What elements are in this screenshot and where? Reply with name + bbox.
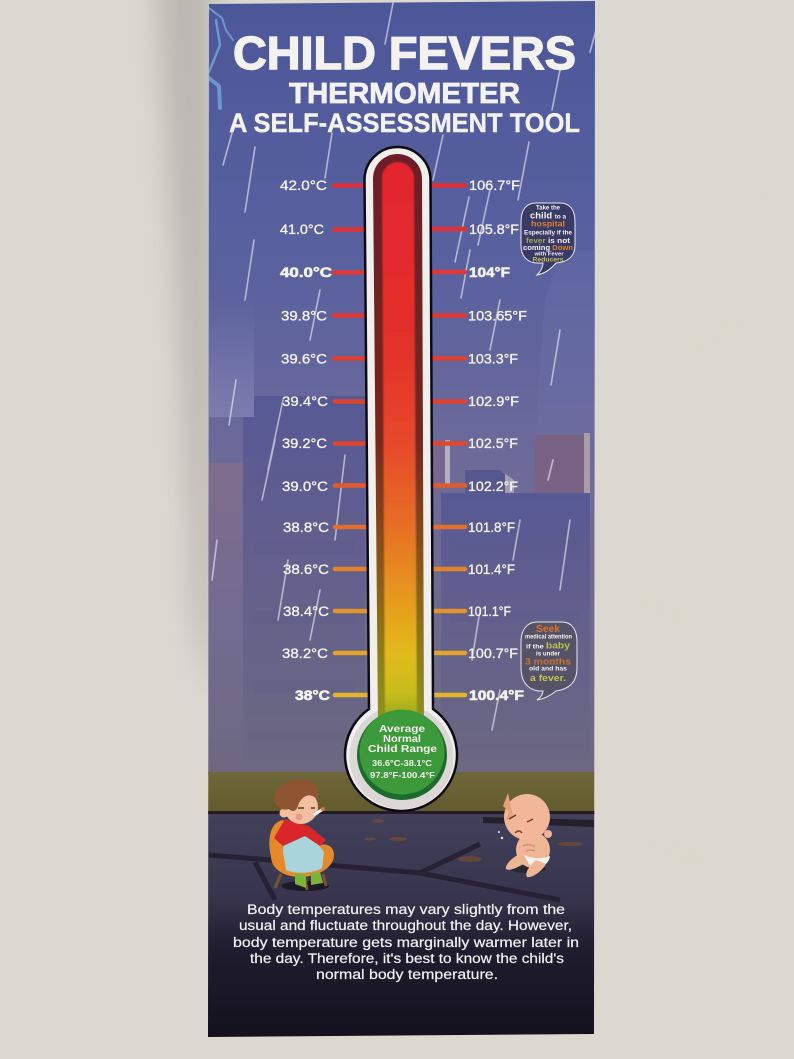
callout: baby under 3 months: is under [536, 650, 560, 658]
Fahrenheit scale labels: 102.2°F [468, 479, 518, 494]
Celsius scale labels: 39.4°C [282, 394, 328, 409]
body text block: Body temperatures may vary slightly from the [247, 902, 565, 917]
callout: hospital advice: fever is not [526, 236, 571, 245]
Celsius scale labels: 38.2°C [282, 646, 328, 661]
Fahrenheit scale labels: 105.8°F [469, 222, 519, 237]
title [229, 27, 580, 138]
Celsius scale labels: 39.0°C [282, 479, 328, 494]
mercury column [382, 162, 417, 725]
callout: baby under 3 months: if the baby [526, 640, 570, 650]
tick marks, left and right [334, 186, 465, 695]
Fahrenheit scale labels [468, 178, 527, 703]
Celsius scale labels: 41.0°C [280, 222, 324, 237]
green bulb [357, 710, 447, 800]
wall background [205, 0, 600, 775]
title line: Thermometer: THERMOMETER [289, 78, 520, 110]
Fahrenheit scale labels: 103.3°F [468, 352, 518, 366]
callout: hospital advice: coming Down [523, 245, 573, 252]
dark channel [373, 154, 424, 725]
bulb text: range: 97.8°F-100.4°F [370, 770, 435, 780]
Fahrenheit scale labels: 104°F [469, 265, 510, 280]
ground band [205, 772, 600, 814]
infographic poster photographed on a countertop [148, 0, 595, 1037]
Fahrenheit scale labels: 100.4°F [469, 688, 524, 703]
title line: Child Fevers: CHILD FEVERS [233, 27, 576, 79]
Celsius scale labels: 40.0°C [280, 265, 332, 280]
Fahrenheit scale labels: 102.9°F [468, 394, 519, 409]
Celsius scale labels: 38.8°C [283, 520, 329, 535]
Celsius scale labels: 39.8°C [281, 308, 327, 324]
bulb text: range: Child Range [368, 743, 437, 755]
body text block: normal body temperature. [316, 967, 498, 982]
body text block: body temperature gets marginally warmer later in [233, 935, 579, 950]
Celsius scale labels: 38°C [295, 688, 330, 703]
glass outline [345, 147, 457, 811]
bulb shading [350, 705, 454, 809]
callout: baby under 3 months: old and has [529, 666, 567, 672]
title line: self-assessment tool: A SELF-ASSESSMENT TOOL [229, 108, 580, 138]
bulb text: range: Average [379, 723, 425, 735]
callout: baby under 3 months [521, 622, 577, 700]
street and dark footer [205, 811, 600, 1042]
callout: hospital advice: hospital [531, 218, 565, 228]
bulb text: range: Normal [383, 733, 421, 745]
body text block: usual and fluctuate throughout the day. However, [239, 918, 572, 933]
callout: baby under 3 months: a fever. [530, 673, 566, 684]
callout: hospital advice [521, 203, 575, 275]
Fahrenheit scale labels: 101.8°F [468, 520, 515, 535]
callout: hospital advice: child to a [530, 210, 567, 220]
callout: baby under 3 months: medical attention [525, 634, 572, 640]
callout: hospital advice: Reducers [532, 256, 564, 264]
Celsius scale labels: 38.4°C [283, 604, 329, 619]
Celsius scale labels: 39.6°C [281, 352, 327, 366]
Fahrenheit scale labels: 101.4°F [468, 562, 515, 577]
city buildings [209, 250, 600, 775]
bulb text: range [368, 723, 437, 780]
thermometer [345, 147, 457, 811]
callout: hospital advice: with Fever [533, 252, 564, 258]
illustration: crying baby [498, 793, 552, 877]
Fahrenheit scale labels: 103.65°F [468, 308, 527, 324]
Celsius scale labels: 39.2°C [282, 436, 327, 451]
callout: hospital advice: Especially if the [524, 230, 572, 236]
body text block [233, 902, 579, 982]
Fahrenheit scale labels: 106.7°F [469, 178, 520, 193]
lightning [209, 8, 233, 108]
Fahrenheit scale labels: 101.1°F [468, 604, 511, 619]
poster card [205, 0, 600, 1042]
bulb text: range: 36.6°C-38.1°C [372, 758, 432, 768]
body text block: the day. Therefore, it's best to know the child's [250, 951, 564, 966]
Fahrenheit scale labels: 102.5°F [468, 436, 518, 451]
Celsius scale labels [280, 178, 332, 703]
Celsius scale labels: 42.0°C [280, 178, 327, 193]
callout: baby under 3 months: 3 months [525, 656, 571, 668]
Fahrenheit scale labels: 100.7°F [468, 646, 518, 661]
callout: baby under 3 months: Seek [536, 623, 560, 635]
illustration: sick child in armchair [269, 780, 334, 891]
Celsius scale labels: 38.6°C [283, 562, 329, 577]
callout: hospital advice: Take the [536, 204, 560, 212]
rain streaks [212, 3, 596, 730]
